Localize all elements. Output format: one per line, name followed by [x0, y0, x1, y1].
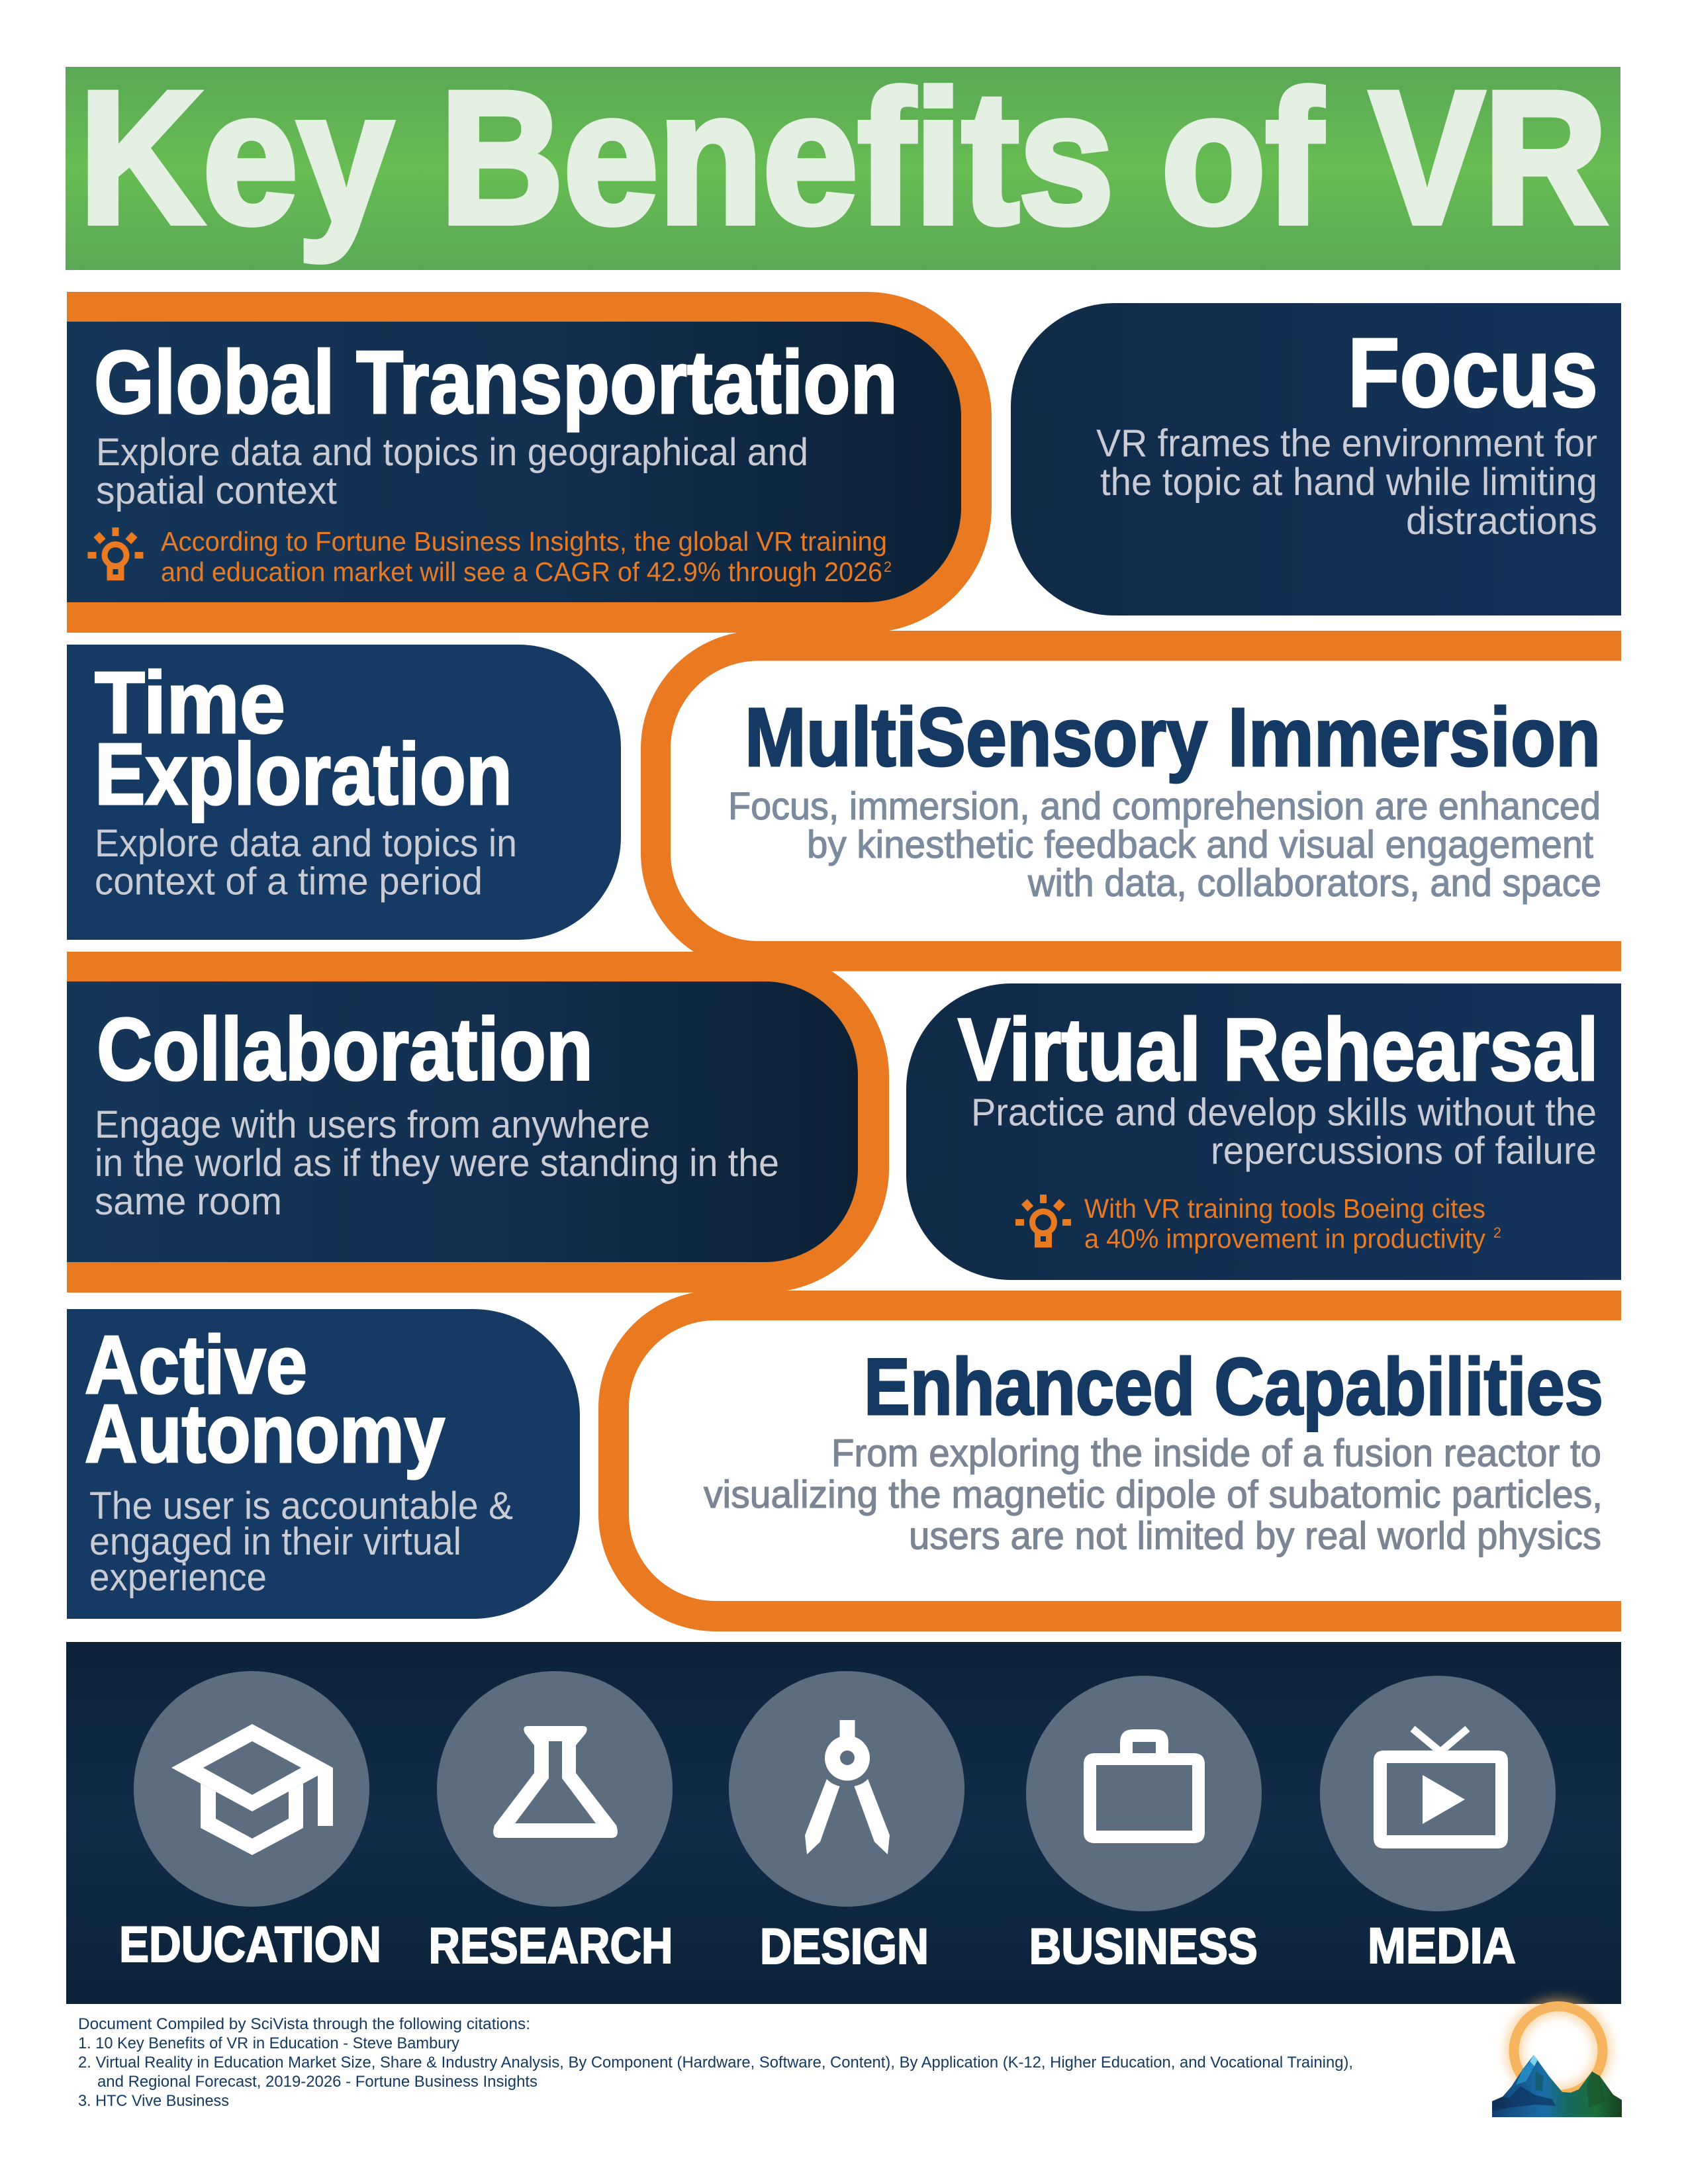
text: multisensory description	[728, 785, 1601, 905]
text: multisensory description: with data, collaborators, and space	[1027, 862, 1601, 905]
panel: global transportation	[67, 292, 992, 633]
text: focus description	[1096, 422, 1597, 543]
logo: SciVista	[1492, 2007, 1622, 2117]
panel: focus	[1011, 303, 1621, 615]
heading: active autonomy	[85, 1320, 445, 1480]
icon: light bulb	[1015, 1195, 1071, 1248]
callout: Boeing statistic: 2	[1493, 1224, 1501, 1241]
heading: multisensory immersion: MultiSensory Immersion	[745, 692, 1601, 784]
text: collaboration description: same room	[95, 1180, 282, 1223]
callout: market statistic: 2	[884, 559, 892, 575]
text: collaboration description: in the world as if they were standing in the	[95, 1142, 779, 1185]
label: design: DESIGN	[760, 1919, 929, 1975]
text: citations: and Regional Forecast, 2019-2026 - Fortune Business Insights	[97, 2073, 538, 2091]
callout: Boeing statistic	[1084, 1193, 1501, 1253]
text: citations	[78, 2015, 1353, 2110]
text: active autonomy description	[89, 1484, 513, 1599]
text: multisensory description: Focus, immersion, and comprehension are enhanced	[728, 785, 1601, 828]
callout: Boeing statistic: With VR training tools Boeing cites	[1084, 1193, 1485, 1224]
icon: television	[1374, 1729, 1508, 1848]
heading: time exploration: Exploration	[95, 725, 512, 823]
heading: time exploration: Time	[95, 654, 285, 751]
text: enhanced capabilities description: From exploring the inside of a fusion reactor to	[831, 1432, 1601, 1475]
heading: time exploration	[95, 654, 512, 823]
panel: multisensory immersion	[641, 631, 1621, 972]
heading: global transportation: Global Transportation	[94, 332, 898, 432]
text: global transportation description: Explore data and topics in geographical and	[96, 431, 808, 474]
callout: Boeing statistic: a 40% improvement in productivity	[1084, 1223, 1485, 1253]
text: virtual rehearsal description: repercussions of failure	[1211, 1130, 1597, 1173]
text: time exploration description: Explore data and topics in	[95, 822, 517, 865]
text: focus description: the topic at hand while limiting	[1100, 461, 1597, 504]
text: virtual rehearsal description	[971, 1091, 1597, 1173]
text: collaboration description	[95, 1103, 779, 1223]
text: global transportation description	[96, 431, 808, 512]
category: research	[429, 1671, 673, 1974]
text: active autonomy description: engaged in their virtual	[89, 1520, 461, 1563]
text: collaboration description: Engage with users from anywhere	[95, 1103, 650, 1146]
text: active autonomy description: experience	[89, 1556, 267, 1599]
label: business: BUSINESS	[1029, 1919, 1258, 1975]
callout: market statistic: and education market will see a CAGR of 42.9% through 2026	[161, 557, 882, 587]
category: business	[1026, 1676, 1262, 1975]
text: focus description: distractions	[1406, 500, 1597, 543]
heading: collaboration: Collaboration	[97, 1001, 593, 1099]
callout: market statistic	[161, 526, 892, 587]
text: citations: Document Compiled by SciVista through the following citations:	[78, 2015, 530, 2033]
panel: time exploration	[67, 645, 621, 940]
panel: virtual rehearsal	[906, 983, 1621, 1280]
text: citations: 1. 10 Key Benefits of VR in Education - Steve Bambury	[78, 2034, 459, 2052]
heading: focus: Focus	[1348, 318, 1598, 428]
label: media: MEDIA	[1368, 1918, 1516, 1974]
panel: enhanced capabilities	[598, 1291, 1621, 1631]
text: virtual rehearsal description: Practice and develop skills without the	[971, 1091, 1597, 1134]
callout: market statistic: According to Fortune Business Insights, the global VR training	[161, 526, 887, 557]
panel: collaboration	[67, 952, 889, 1293]
panel: active autonomy	[67, 1309, 580, 1619]
category: education	[119, 1671, 381, 1973]
text: time exploration description: context of a time period	[95, 860, 483, 903]
label: education: EDUCATION	[119, 1917, 381, 1973]
heading: virtual rehearsal: Virtual Rehearsal	[958, 1001, 1599, 1099]
icon: briefcase	[1084, 1729, 1205, 1843]
icon: light bulb	[87, 527, 143, 580]
text: citations: 3. HTC Vive Business	[78, 2092, 229, 2110]
icon: compass	[805, 1720, 890, 1854]
text: time exploration description	[95, 822, 517, 903]
panel: application areas	[66, 1642, 1621, 2004]
text: active autonomy description: The user is accountable &	[89, 1484, 513, 1527]
text: global transportation description: spatial context	[96, 469, 337, 512]
category: media	[1320, 1676, 1556, 1974]
category: design	[729, 1671, 964, 1975]
text: enhanced capabilities description	[704, 1432, 1603, 1558]
label: research: RESEARCH	[429, 1918, 673, 1974]
text: citations: 2. Virtual Reality in Education Market Size, Share & Industry Analysis, By Component (Hardware, Software, Content), By Application (K-12, Higher Education, and Vocational Training),	[78, 2054, 1353, 2071]
icon: graduation cap	[171, 1724, 333, 1855]
text: multisensory description: by kinesthetic feedback and visual engagement	[807, 823, 1593, 866]
text: enhanced capabilities description: users are not limited by real world physics	[909, 1515, 1601, 1558]
text: focus description: VR frames the environment for	[1096, 422, 1597, 465]
text: enhanced capabilities description: visualizing the magnetic dipole of subatomic particles,	[704, 1473, 1603, 1516]
heading: active autonomy: Autonomy	[85, 1388, 445, 1480]
heading: active autonomy: Active	[85, 1320, 307, 1411]
title banner	[66, 53, 1620, 270]
icon: flask	[493, 1726, 618, 1838]
